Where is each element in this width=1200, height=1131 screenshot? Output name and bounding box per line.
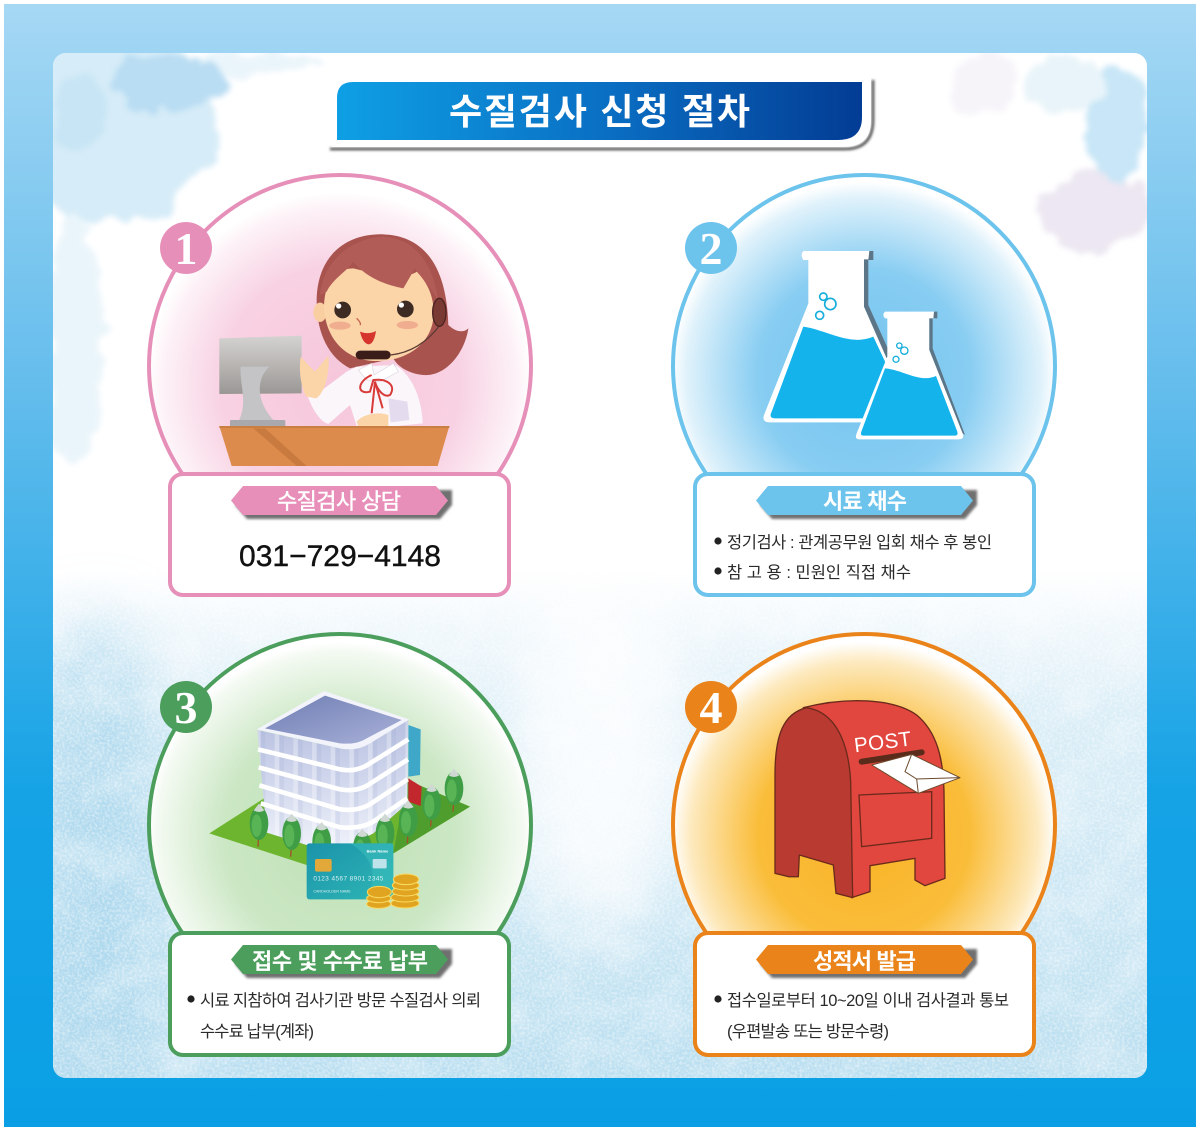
icon: building, card and coins: CARDHOLDER NAME xyxy=(313,890,351,894)
badge 1: 1 xyxy=(174,223,198,274)
panel: step 1 consultation xyxy=(149,175,531,595)
ribbon 3: 접수 및 수수료 납부 xyxy=(252,949,428,974)
icon: flasks xyxy=(763,251,965,439)
ribbon 4 xyxy=(756,945,977,978)
panel: step 4 report xyxy=(673,634,1055,1055)
step 2 text: 정기검사 : 관계공무원 입회 채수 후 봉인 xyxy=(727,533,992,552)
ribbon 1: 수질검사 상담 xyxy=(277,489,401,514)
step 4 text xyxy=(714,991,1009,1041)
icon: post box: POST xyxy=(853,727,913,757)
info box 1 xyxy=(170,474,509,595)
badge 4 xyxy=(685,681,737,733)
step 4 text: 접수일로부터 10~20일 이내 검사결과 통보 xyxy=(727,991,1009,1010)
panel: step 2 sampling xyxy=(673,175,1055,595)
step 2 text xyxy=(714,533,992,582)
title banner xyxy=(330,75,873,149)
icon: counselor at desk xyxy=(219,234,468,466)
info box 2 xyxy=(695,474,1034,595)
ribbon 2: 시료 채수 xyxy=(823,489,907,514)
step 4 text: (우편발송 또는 방문수령) xyxy=(727,1022,889,1041)
step 3 text xyxy=(187,991,481,1041)
step 3 text: 수수료 납부(계좌) xyxy=(200,1022,314,1041)
icon: post box xyxy=(775,701,960,898)
badge 3 xyxy=(160,681,212,733)
badge 2 xyxy=(685,222,737,274)
phone number: 031−729−4148 xyxy=(239,540,441,573)
panel: step 3 payment xyxy=(149,634,531,1055)
badge 4: 4 xyxy=(700,682,722,733)
info box 4 xyxy=(695,933,1034,1055)
badge 3: 3 xyxy=(174,682,198,733)
badge 1 xyxy=(160,222,212,274)
ribbon 4: 성적서 발급 xyxy=(813,949,916,974)
title text: 수질검사 신청 절차 xyxy=(449,91,750,132)
ribbon 3 xyxy=(231,945,452,978)
step 3 text: 시료 지참하여 검사기관 방문 수질검사 의뢰 xyxy=(200,991,481,1010)
icon: building, card and coins: Bank Name xyxy=(367,848,389,853)
badge 2: 2 xyxy=(700,223,722,274)
ribbon 2 xyxy=(756,486,977,519)
step 2 text: 참 고 용 : 민원인 직접 채수 xyxy=(727,563,911,582)
ribbon 1 xyxy=(231,486,452,519)
icon: building, card and coins xyxy=(209,691,470,908)
icon: building, card and coins: 0123 4567 8901 2345 xyxy=(313,875,384,882)
info box 3 xyxy=(170,933,509,1055)
